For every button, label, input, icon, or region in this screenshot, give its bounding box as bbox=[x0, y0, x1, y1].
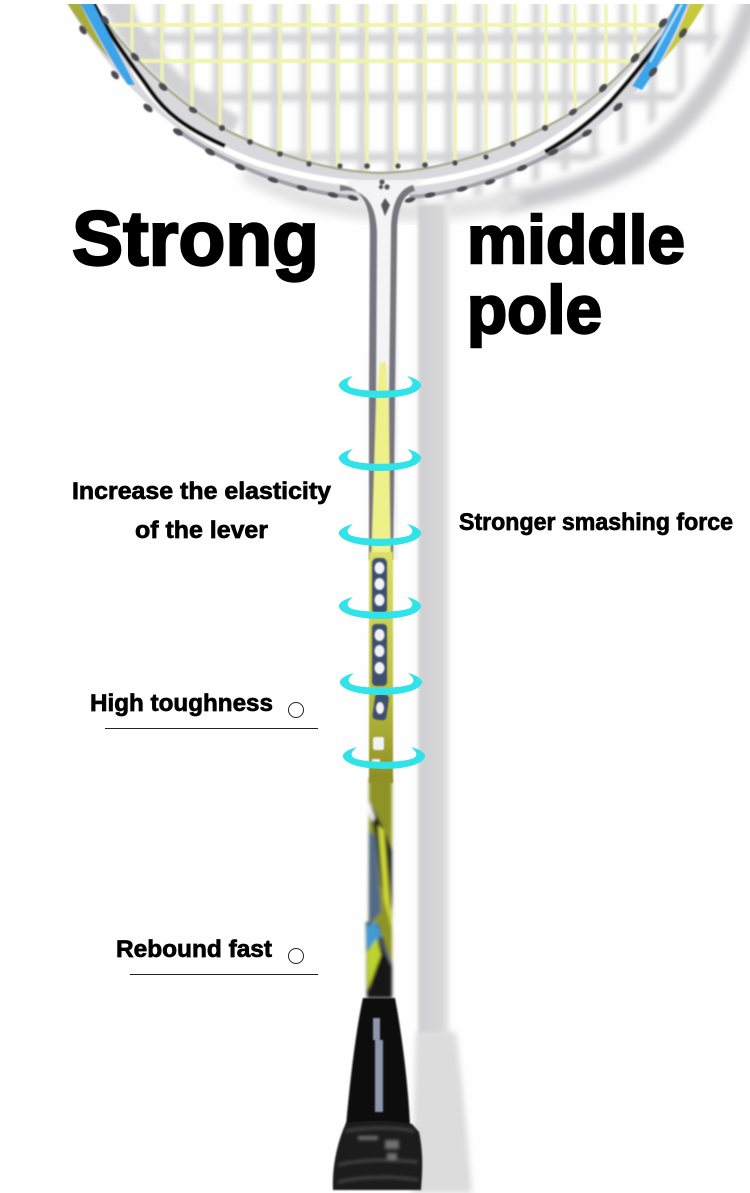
heading: middle bbox=[467, 202, 685, 278]
frame blue stripe bbox=[80, 3, 135, 85]
callout: rebound fast: Rebound fast bbox=[116, 936, 272, 963]
text: increase elasticity bbox=[72, 478, 332, 544]
grip wrap texture bbox=[338, 1128, 418, 1182]
text: increase elasticity: of the lever bbox=[135, 517, 268, 544]
callout: high toughness bbox=[90, 690, 318, 729]
shaft shadow bbox=[418, 205, 450, 1035]
yellow section bbox=[369, 362, 393, 560]
lower graphic section bbox=[366, 778, 392, 998]
racket frame bbox=[67, 3, 705, 204]
frame band bbox=[67, 3, 705, 198]
handle cone bbox=[346, 998, 410, 1126]
heading: Strong bbox=[72, 196, 319, 282]
heading bbox=[72, 196, 685, 348]
t-joint and upper silver section bbox=[345, 180, 425, 560]
heading: pole bbox=[467, 272, 602, 348]
shadow of left frame inside the head bbox=[112, 0, 235, 128]
flex rings bbox=[339, 376, 425, 769]
top edge bbox=[0, 0, 750, 4]
logo mark bbox=[379, 179, 390, 216]
shaft dark stripes bbox=[340, 185, 415, 560]
callout: high toughness: High toughness bbox=[90, 690, 273, 717]
callout: rebound fast bbox=[116, 936, 318, 975]
lower olive section bbox=[369, 552, 393, 783]
shadow of strings bbox=[128, 4, 721, 204]
handle shadow bbox=[412, 1032, 472, 1193]
racket handle bbox=[333, 998, 422, 1190]
text: increase elasticity: Increase the elasticity bbox=[72, 478, 332, 505]
frame yellow stripe bbox=[67, 3, 110, 60]
racket shaft bbox=[340, 179, 425, 998]
shadow of frame arc, right bbox=[500, 0, 750, 204]
shaft lettering bbox=[372, 558, 389, 721]
text: stronger smashing force: Stronger smashing force bbox=[459, 509, 733, 536]
grommets bbox=[78, 14, 689, 204]
shadow of frame arc, centre bbox=[245, 172, 520, 212]
racket strings bbox=[108, 4, 660, 172]
handle print bbox=[373, 1018, 383, 1112]
grip bbox=[333, 1121, 422, 1190]
